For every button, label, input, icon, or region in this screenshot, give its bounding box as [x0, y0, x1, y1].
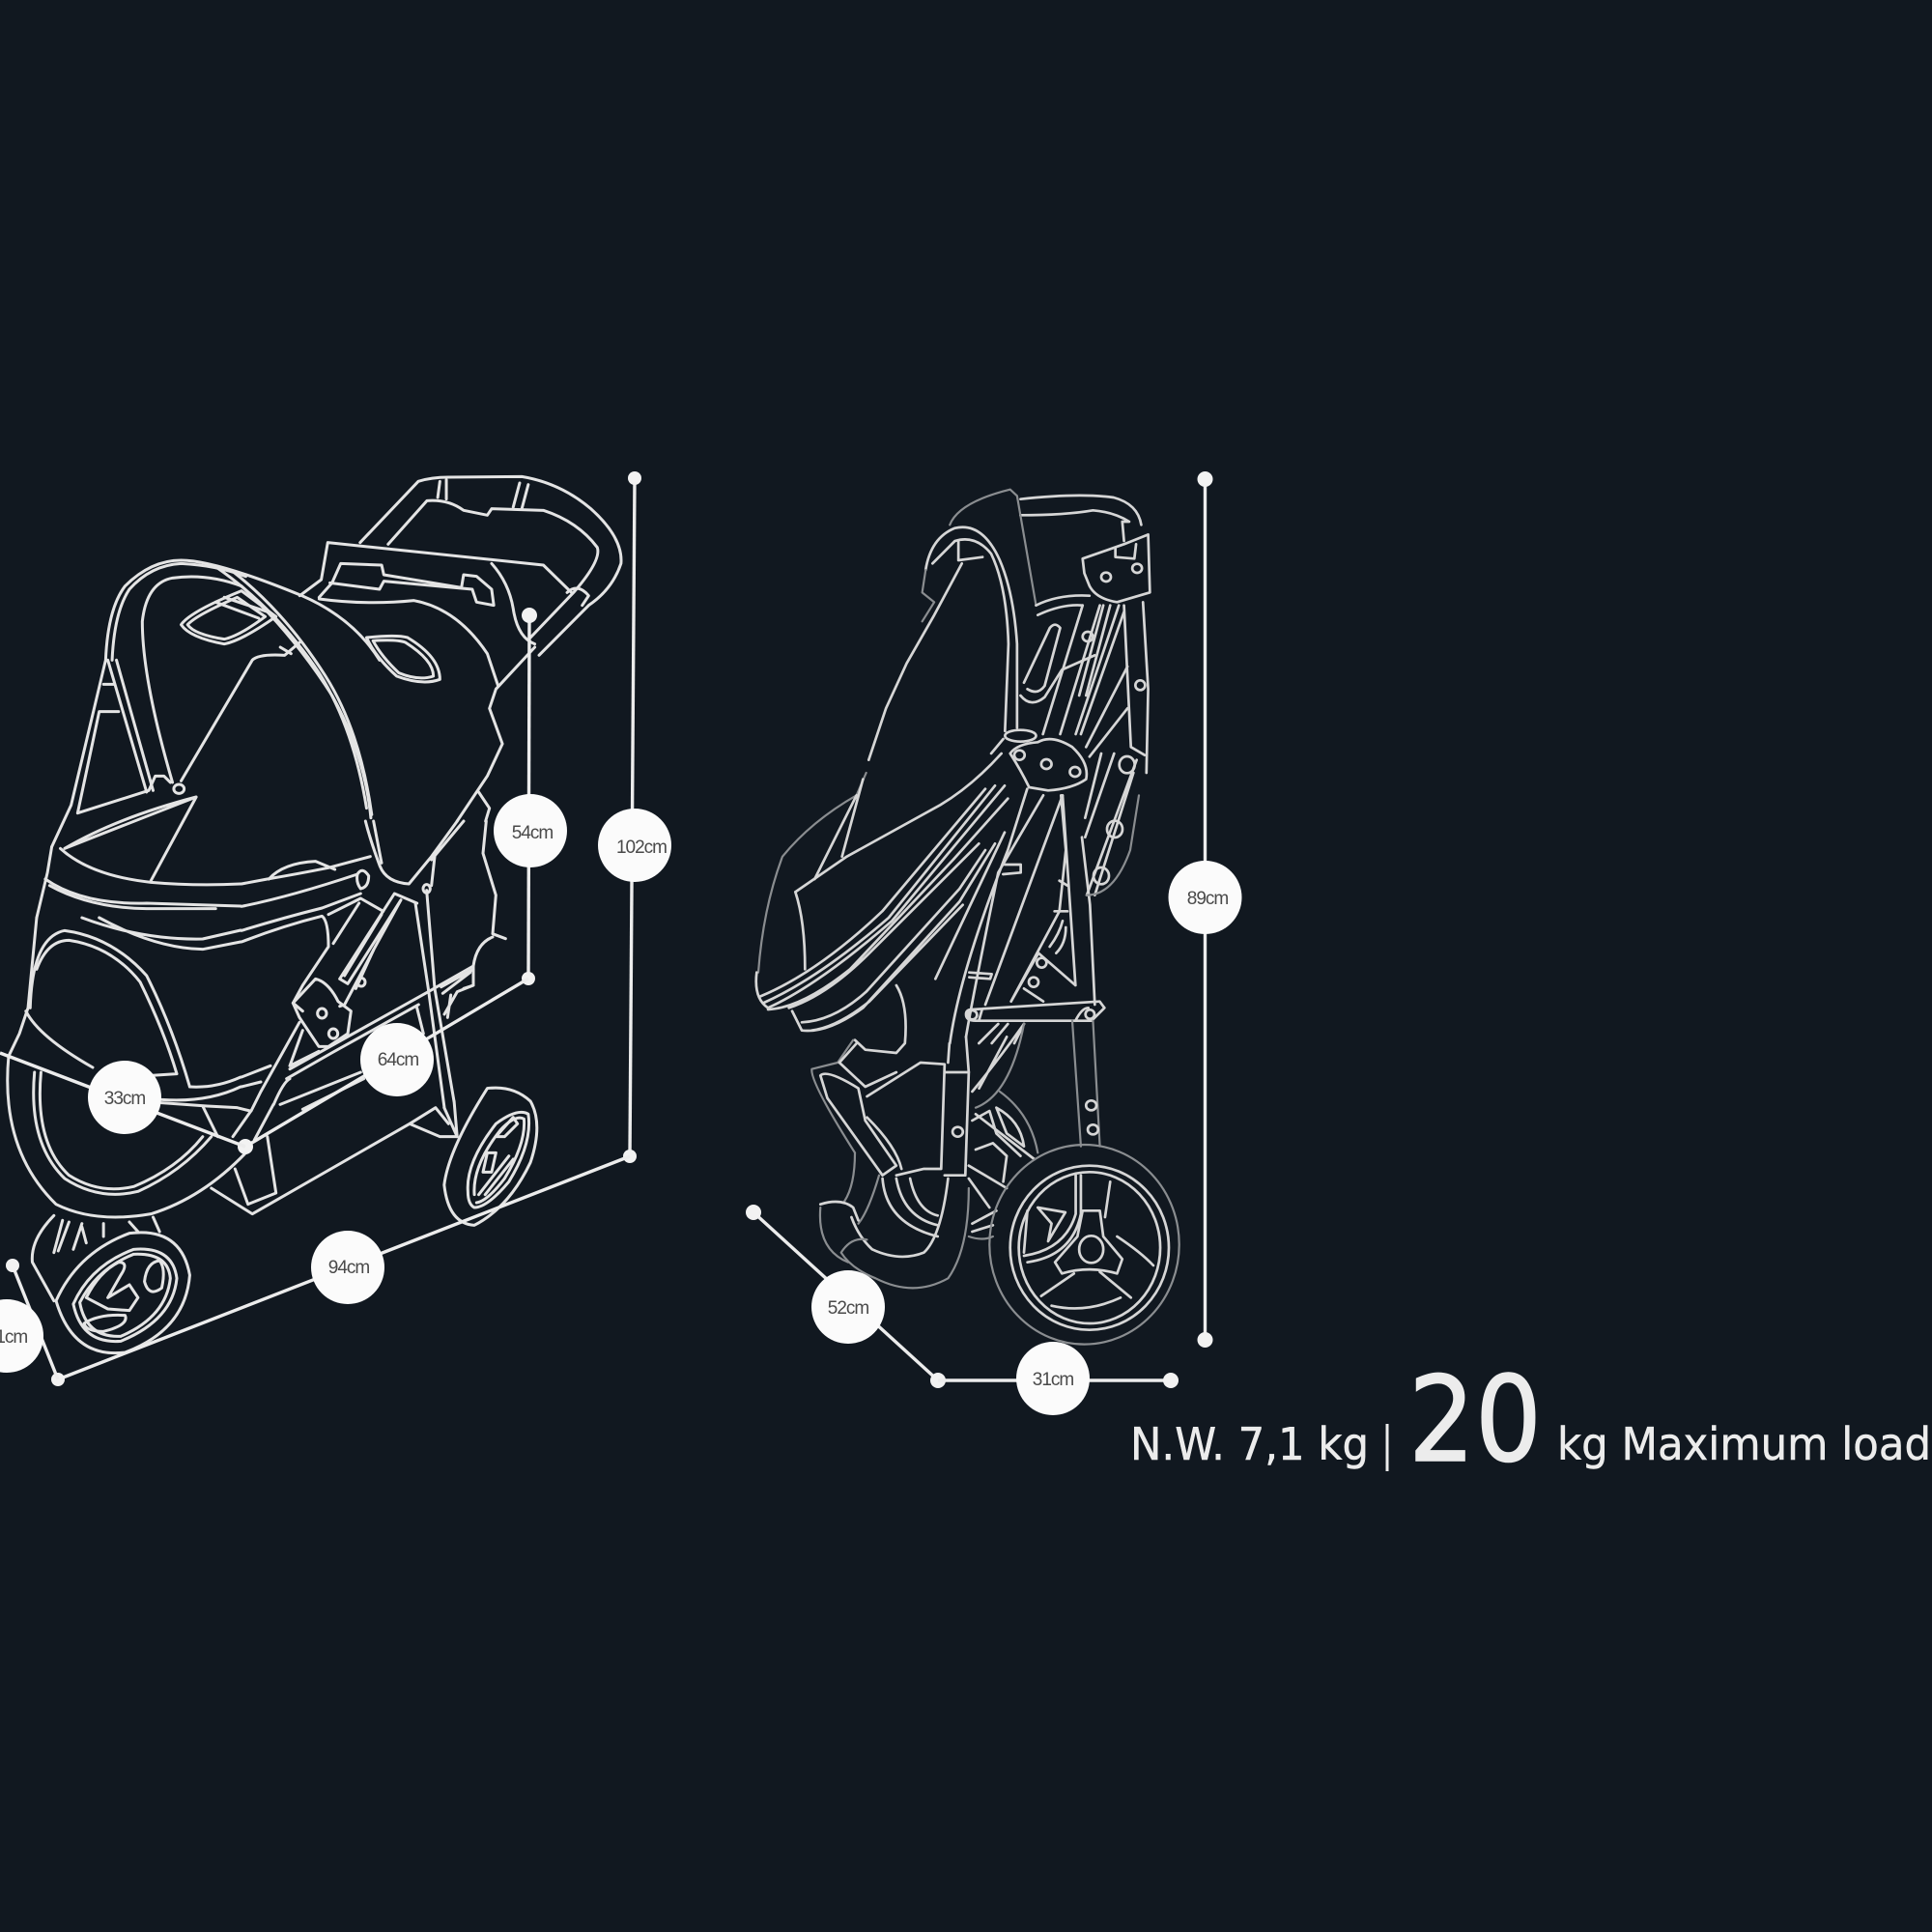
large number 20: 20 [1408, 1351, 1542, 1489]
dimension line: width [6, 1259, 58, 1379]
dimension line: seat depth [0, 1053, 245, 1147]
dimension line: length [51, 1156, 630, 1386]
badge: 54cm: 54cm [512, 823, 553, 843]
badge: 33cm: 33cm [104, 1089, 145, 1109]
dimension line: folded length [746, 1205, 946, 1388]
badge: 52cm: 52cm [828, 1298, 868, 1319]
stroller lower: tub, wheels [8, 918, 537, 1353]
badge: 31cm: 31cm [1033, 1370, 1073, 1390]
dimension lines: open stroller [0, 471, 671, 1386]
stroller upper: handle, canopy, basket [37, 476, 621, 918]
dimension line: folded width [938, 1373, 1179, 1388]
dimension line: total height [623, 471, 641, 1163]
badge: 52cm [811, 1270, 885, 1344]
badge: 94cm: 94cm [328, 1258, 369, 1278]
badge: 64cm: 64cm [378, 1050, 418, 1070]
badge: 94cm [311, 1231, 384, 1304]
badge: 54cm [494, 794, 567, 867]
dimension line: handle height [522, 608, 537, 985]
folded stroller lower and wheel [811, 985, 1179, 1345]
dimension line: folded height [1198, 471, 1213, 1348]
badge: 102cm: 102cm [616, 838, 667, 858]
folded stroller middle: seat, tubes, rail [756, 753, 1139, 1043]
badge: partial width [0, 1299, 43, 1373]
net weight text: N.W. 7,1 kg [1130, 1418, 1369, 1470]
badge: 31cm [1016, 1342, 1090, 1415]
weight caption [1130, 1351, 1931, 1489]
badge: 89cm: 89cm [1187, 889, 1228, 909]
badge: 102cm [598, 809, 671, 882]
dimension lines: folded stroller [746, 471, 1242, 1415]
badge: 64cm [360, 1023, 434, 1096]
badge: 89cm [1169, 861, 1242, 934]
folded stroller upper [868, 490, 1150, 790]
dimension line: seat length [238, 979, 528, 1154]
badge: 33cm [88, 1061, 161, 1134]
stroller middle: frame, folding plate, tubes [242, 821, 505, 1111]
illustration: open stroller line drawing [8, 476, 621, 1353]
illustration: folded stroller line drawing [756, 490, 1179, 1345]
separator [1385, 1424, 1389, 1471]
